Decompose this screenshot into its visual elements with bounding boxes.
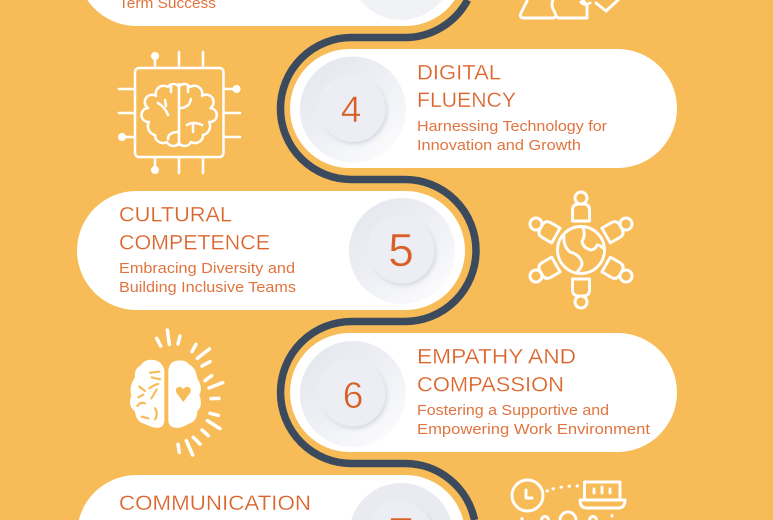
- step 5 description: Embracing Diversity and: [119, 261, 295, 277]
- step 3 disc: [360, 0, 442, 20]
- panel: step 6: [290, 333, 677, 452]
- icon: brain with heart: [130, 330, 223, 455]
- serpentine connector path: [280, 0, 476, 520]
- step 7 heading: COMMUNICATION: [119, 492, 311, 515]
- step 4 heading: DIGITAL: [417, 62, 501, 84]
- step 5 disc: [349, 198, 455, 304]
- icon: teamwork and check: [520, 0, 618, 18]
- panel: step 5: [77, 191, 465, 310]
- icon: people around globe: [527, 192, 635, 308]
- panel: step 3: [87, 0, 455, 26]
- step 4 number: 4: [341, 89, 361, 130]
- step 5 heading line 2: COMPETENCE: [119, 232, 270, 254]
- step 5 number: 5: [388, 224, 414, 276]
- panel: step 4: [290, 49, 677, 168]
- step 4 description line 2: Innovation and Growth: [417, 138, 581, 154]
- step 5 heading: CULTURAL: [119, 204, 232, 226]
- step 7 disc: [351, 483, 451, 520]
- step 6 heading line 2: COMPASSION: [417, 374, 564, 396]
- step 4 heading line 2: FLUENCY: [417, 89, 516, 112]
- step 6 description line 2: Empowering Work Environment: [417, 422, 650, 438]
- step 6 heading: EMPATHY AND: [417, 346, 576, 368]
- icon: brain chip: [119, 52, 240, 173]
- icon: clock and laptop: [512, 480, 625, 520]
- panel: step 7: [79, 475, 463, 520]
- step 6 number: 6: [343, 375, 363, 416]
- step 5 description line 2: Building Inclusive Teams: [119, 280, 296, 296]
- step 4 disc: [300, 56, 406, 162]
- step 6 description: Fostering a Supportive and: [417, 403, 609, 419]
- step 4 description: Harnessing Technology for: [417, 119, 607, 135]
- step 6 disc: [300, 341, 406, 447]
